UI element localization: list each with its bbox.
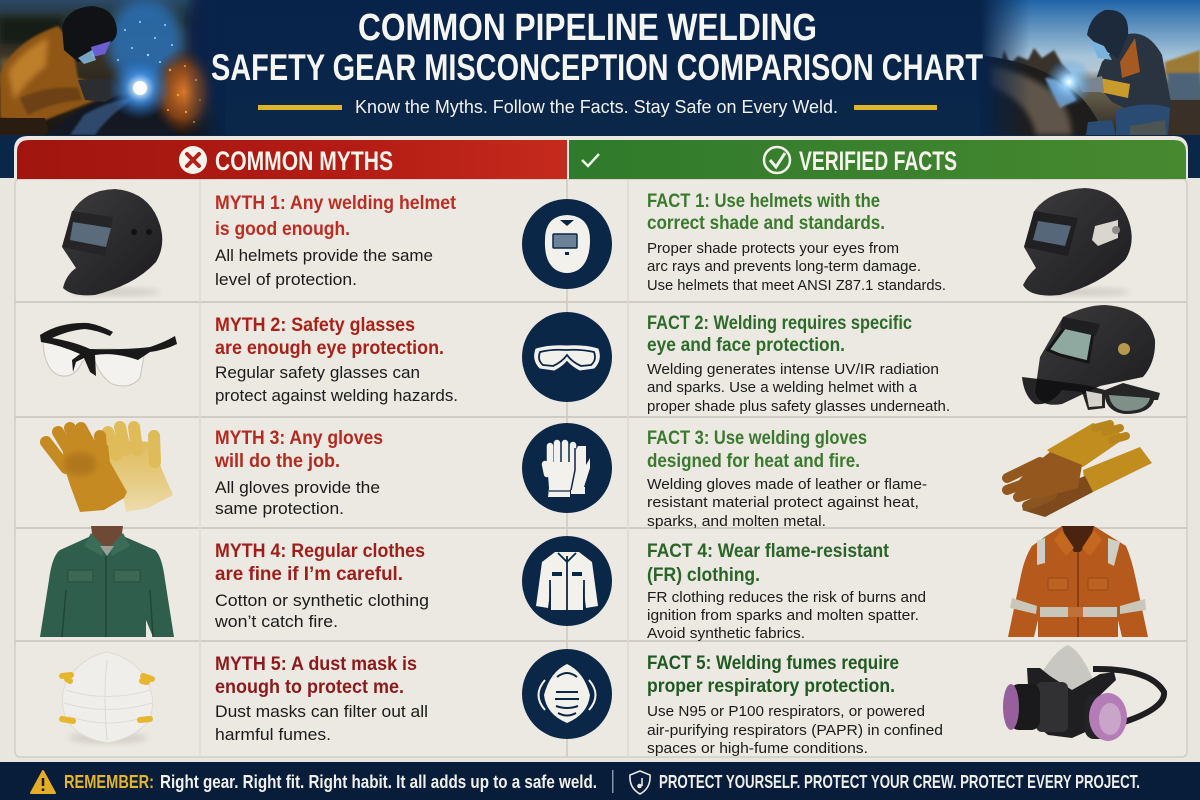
icon: check in circle xyxy=(764,147,790,173)
myth 4 text: are fine if I’m careful. xyxy=(215,564,403,585)
myth 4 text xyxy=(214,541,429,631)
fact 2 text: and sparks. Use a welding helmet with a xyxy=(647,380,918,396)
icon: jacket badge xyxy=(522,536,612,626)
fact 4 text: (FR) clothing. xyxy=(647,565,760,586)
fact 2 text xyxy=(647,313,950,415)
icon: goggles badge xyxy=(522,312,612,402)
icon: mask badge xyxy=(522,649,612,739)
fact 5 text: Use N95 or P100 respirators, or powered xyxy=(647,704,925,720)
fact 1 text: correct shade and standards. xyxy=(647,213,885,234)
fact 2 text: FACT 2: Welding requires specific xyxy=(647,313,912,334)
fact 5 text: air-purifying respirators (PAPR) in confined xyxy=(647,723,943,739)
myths column header: COMMON MYTHS xyxy=(215,146,393,176)
icon: green work shirt xyxy=(40,526,174,637)
icon: welding face badge xyxy=(522,199,612,289)
icon: warning triangle xyxy=(31,771,55,793)
myth 3 text: MYTH 3: Any gloves xyxy=(215,428,383,449)
myth 3 text: same protection. xyxy=(215,500,344,518)
myth 5 text: harmful fumes. xyxy=(215,726,331,744)
icon: half-mask respirator xyxy=(1003,645,1164,741)
reminder text: REMEMBER: xyxy=(64,772,154,792)
fact 5 text: proper respiratory protection. xyxy=(647,676,895,697)
icon: myth welding helmet xyxy=(62,189,162,296)
myth 1 text: All helmets provide the same xyxy=(215,247,433,265)
fact 2 text: Welding generates intense UV/IR radiation xyxy=(647,362,939,378)
photo: welder on left xyxy=(0,0,218,135)
facts column header: VERIFIED FACTS xyxy=(799,146,957,176)
title: SAFETY GEAR MISCONCEPTION COMPARISON CHART xyxy=(211,47,983,88)
fact 2 text: proper shade plus safety glasses underneath. xyxy=(647,399,950,415)
title: COMMON PIPELINE WELDING xyxy=(358,7,817,49)
myth 5 text: MYTH 5: A dust mask is xyxy=(215,654,417,675)
myth 3 text xyxy=(214,428,383,518)
fact 1 text: Use helmets that meet ANSI Z87.1 standards. xyxy=(647,278,946,294)
myth 2 text: are enough eye protection. xyxy=(215,338,444,359)
icon: safety glasses xyxy=(40,323,177,386)
myth 2 text: protect against welding hazards. xyxy=(215,387,458,405)
fact 5 text: spaces or high-fume conditions. xyxy=(647,741,868,757)
header banner xyxy=(0,0,1200,178)
icon: orange flame-resistant shirt xyxy=(1008,526,1148,637)
myth 4 text: Cotton or synthetic clothing xyxy=(215,592,429,610)
fact 5 text xyxy=(647,653,943,757)
fact 4 text: FR clothing reduces the risk of burns and xyxy=(647,590,926,606)
subtitle with accent lines: Know the Myths. Follow the Facts. Stay Safe on Every Weld. xyxy=(355,97,838,117)
myth 3 text: will do the job. xyxy=(214,451,340,472)
icon: welding gauntlets xyxy=(1007,423,1152,517)
fact 3 text: sparks, and molten metal. xyxy=(647,514,826,530)
myth 5 text: enough to protect me. xyxy=(215,677,404,698)
fact 1 text xyxy=(647,191,946,294)
fact 1 text: FACT 1: Use helmets with the xyxy=(647,191,880,212)
icon: x in circle xyxy=(179,146,207,174)
fact 4 text: ignition from sparks and molten spatter. xyxy=(647,608,919,624)
myth 1 text: MYTH 1: Any welding helmet xyxy=(215,193,457,214)
fact 3 text: designed for heat and fire. xyxy=(647,451,860,472)
fact 1 text: arc rays and prevents long-term damage. xyxy=(647,259,921,275)
myth 2 text: Regular safety glasses can xyxy=(215,364,420,382)
myth 3 text: All gloves provide the xyxy=(215,479,380,497)
fact 5 text: FACT 5: Welding fumes require xyxy=(647,653,899,674)
icon: gloves badge xyxy=(522,423,612,513)
fact 2 text: eye and face protection. xyxy=(647,335,845,356)
myth 4 text: MYTH 4: Regular clothes xyxy=(215,541,425,562)
myth 2 text xyxy=(215,315,458,405)
fact 4 text: FACT 4: Wear flame-resistant xyxy=(647,541,890,562)
comparison card xyxy=(14,136,1188,757)
myth 1 text xyxy=(215,193,457,289)
icon: work gloves xyxy=(46,427,173,512)
myths column header xyxy=(17,140,567,179)
fact 3 text: resistant material protect against heat, xyxy=(647,495,919,511)
title xyxy=(211,7,983,88)
icon: fact welding helmet xyxy=(1023,188,1132,296)
myth 2 text: MYTH 2: Safety glasses xyxy=(215,315,415,336)
fact 3 text: FACT 3: Use welding gloves xyxy=(647,428,867,449)
fact 1 text: Proper shade protects your eyes from xyxy=(647,241,899,257)
myth 4 text: won’t catch fire. xyxy=(214,613,338,631)
fact 4 text xyxy=(647,541,926,642)
myth 5 text: Dust masks can filter out all xyxy=(215,703,428,721)
icon: raised helmet with dark glasses xyxy=(1022,305,1160,414)
icon: dust mask xyxy=(62,652,153,744)
myth 5 text xyxy=(215,654,428,744)
photo: welder on right xyxy=(980,0,1200,135)
row dividers xyxy=(15,302,1187,641)
myth 1 text: is good enough. xyxy=(215,219,350,240)
fact 3 text xyxy=(647,428,927,530)
fact 3 text: Welding gloves made of leather or flame- xyxy=(647,477,927,493)
reminder text: Right gear. Right fit. Right habit. It all adds up to a safe weld. xyxy=(160,772,597,792)
icon: small check xyxy=(582,154,599,166)
myth 1 text: level of protection. xyxy=(215,271,357,289)
facts column header xyxy=(569,140,1186,179)
footer bar xyxy=(0,762,1200,800)
icon: shield xyxy=(630,771,650,794)
fact 4 text: Avoid synthetic fabrics. xyxy=(647,626,805,642)
